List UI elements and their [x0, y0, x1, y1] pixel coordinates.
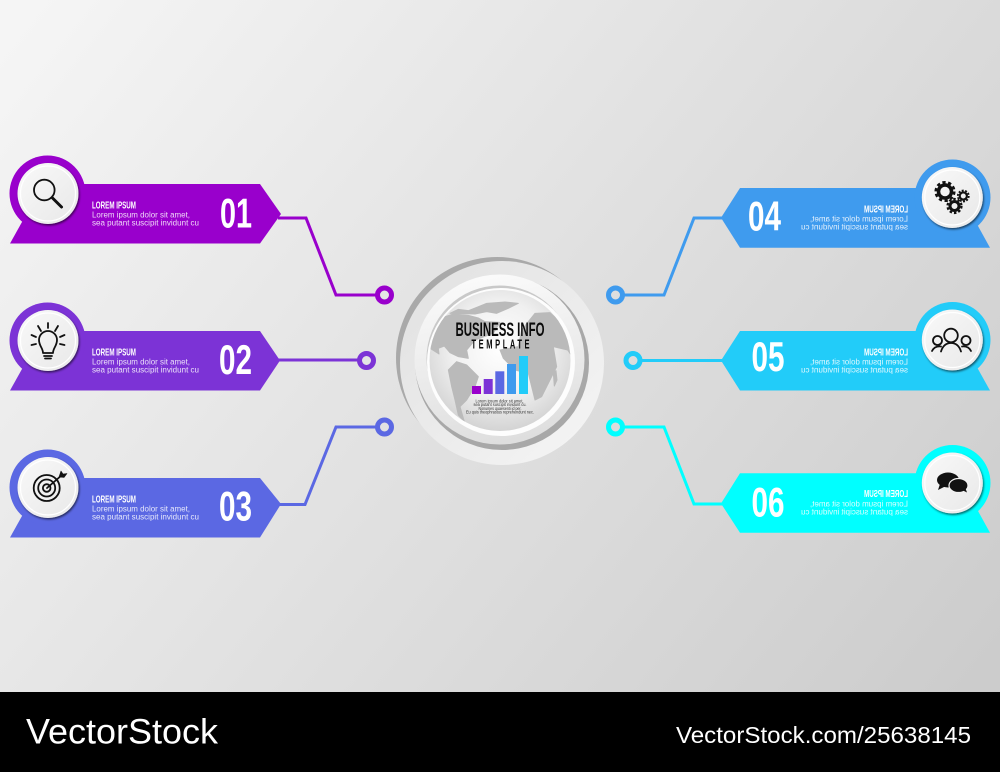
panel: 01 [10, 156, 281, 244]
icon: magnifier [34, 180, 62, 207]
panel: 02 [10, 302, 280, 390]
panel: 02: LOREM IPSUM [92, 348, 136, 359]
center body text: Eu quis theophrastus reprehendunt nec. [466, 410, 534, 415]
connector: 03 [278, 420, 392, 504]
footer logo: VectorStock [26, 712, 219, 752]
center subtitle: TEMPLATE [472, 339, 530, 352]
panel: 05: LOREM IPSUM [864, 348, 908, 358]
world map [425, 302, 573, 422]
panel: 06 [721, 445, 990, 533]
panel: 03: sea putant suscipit invidunt cu [92, 512, 199, 521]
panel: 01: 01 [220, 190, 252, 236]
panel: 02: sea putant suscipit invidunt cu [92, 365, 199, 374]
footer bar [0, 692, 1000, 772]
icon: people [932, 329, 971, 352]
icon: gears [936, 182, 969, 213]
icon: speech bubbles [937, 472, 968, 492]
panel: 05: Lorem ipsum dolor sit amet, [810, 358, 908, 366]
connector: 04 [608, 218, 723, 302]
panel: 04 [721, 160, 990, 248]
panel: 04: LOREM IPSUM [864, 205, 908, 216]
footer image id: VectorStock.com/25638145 [676, 722, 971, 748]
center body text [466, 398, 534, 415]
panel: 03 [10, 450, 281, 538]
panel: central globe badge [396, 257, 604, 465]
panel: 06: Lorem ipsum dolor sit amet, [810, 500, 908, 508]
connector: 01 [278, 218, 392, 302]
center body text: Lorem ipsum dolor sit amet, [476, 398, 524, 404]
panel: 02: 02 [219, 336, 252, 383]
panel: 06: 06 [752, 479, 784, 526]
panel: 04: Lorem ipsum dolor sit amet, [810, 215, 908, 224]
icon: target [34, 471, 67, 501]
panel: 05 [721, 302, 990, 390]
connector: 02 [278, 354, 374, 368]
panel: 04: 04 [748, 192, 781, 240]
connector: 05 [626, 354, 723, 368]
connector: 06 [608, 420, 723, 504]
center body text: Nonumes quaesenti id per. [478, 406, 522, 411]
center title: BUSINESS INFO [456, 320, 544, 341]
icon: light bulb [32, 323, 64, 358]
panel: 01: Lorem ipsum dolor sit amet, [92, 210, 190, 220]
panel: 03: 03 [219, 483, 252, 530]
panel: 05: sea putant suscipit invidunt cu [801, 365, 908, 374]
panel: 01: LOREM IPSUM [92, 200, 136, 212]
panel: 03: Lorem ipsum dolor sit amet, [92, 504, 190, 514]
panel: 01: sea putant suscipit invidunt cu [92, 218, 199, 227]
panel: 02: Lorem ipsum dolor sit amet, [92, 358, 190, 366]
bar chart [472, 356, 528, 394]
panel: 04: sea putant suscipit invidunt cu [801, 222, 908, 232]
center body text: sea putant suscipit invidunt cu. [474, 402, 526, 407]
panel: 03: LOREM IPSUM [92, 495, 136, 506]
panel: 05: 05 [752, 333, 784, 380]
panel: 06: LOREM IPSUM [864, 489, 908, 500]
panel: 06: sea putant suscipit invidunt cu [801, 507, 908, 516]
